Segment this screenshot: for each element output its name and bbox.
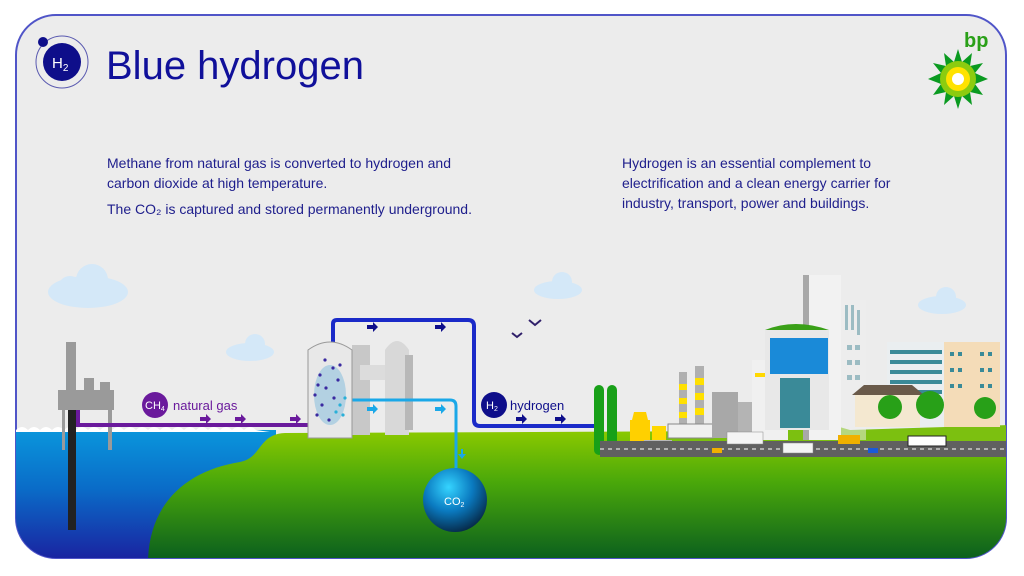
- CO2 storage sphere: 2: [460, 502, 464, 509]
- CO2 storage sphere: CO: [444, 496, 460, 508]
- label: CH4 natural gas: [142, 392, 301, 424]
- label: CH4 natural gas: 4: [161, 406, 165, 413]
- label: H2 hydrogen: [481, 392, 566, 424]
- text: left: carbon dioxide at high temperature.: [107, 175, 327, 191]
- title icon: H2: 2: [63, 63, 69, 74]
- CO2 storage sphere: [423, 468, 487, 532]
- pipe: natural gas: [78, 410, 310, 425]
- text: left: The CO₂ is captured and stored permanently underground.: [107, 201, 472, 217]
- city: [594, 275, 1006, 457]
- logo: bp: [928, 30, 988, 109]
- arrows: hydrogen top: [367, 322, 446, 332]
- text: right: [622, 155, 891, 211]
- birds: [512, 320, 541, 337]
- text: left: [107, 155, 472, 217]
- oil rig: [58, 342, 114, 530]
- label: H2 hydrogen: 2: [494, 406, 498, 413]
- pipe: CO2: [350, 400, 456, 470]
- clouds: [48, 264, 966, 361]
- title icon: H2: H: [52, 55, 63, 72]
- text: right: Hydrogen is an essential complement to: [622, 155, 871, 171]
- arrows: CO2: [367, 404, 466, 459]
- text: right: industry, transport, power and buildings.: [622, 195, 869, 211]
- title icon: H2: [36, 36, 88, 88]
- label: CH4 natural gas: natural gas: [173, 398, 238, 413]
- land: [148, 430, 1010, 560]
- reformer: [308, 342, 352, 438]
- label: H2 hydrogen: H: [486, 400, 494, 412]
- logo: bp: bp: [964, 30, 988, 52]
- city hill: [666, 425, 1006, 441]
- label: CH4 natural gas: CH: [145, 400, 161, 412]
- label: H2 hydrogen: hydrogen: [510, 398, 564, 413]
- plant structure: [352, 341, 413, 435]
- text: left: Methane from natural gas is converted to hydrogen and: [107, 155, 451, 171]
- title: Blue hydrogen: [106, 44, 364, 88]
- sea: [16, 427, 276, 560]
- pipe: hydrogen: [333, 320, 600, 426]
- text: right: electrification and a clean energy carrier for: [622, 175, 891, 191]
